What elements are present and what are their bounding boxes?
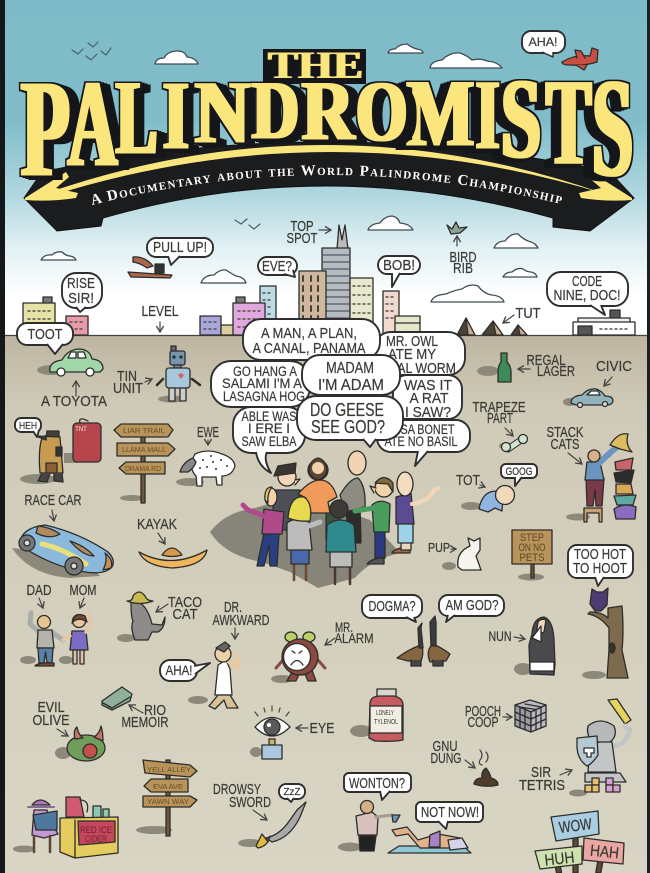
- rio memoir: book: RIO: [144, 703, 166, 719]
- civic: car: [563, 359, 632, 408]
- title word: PALINDROMISTS: A: [68, 55, 117, 192]
- rio memoir: book: [102, 687, 168, 731]
- person: grey sweater bald: [340, 451, 366, 543]
- stack cats: man and cats: [546, 425, 636, 522]
- title word: PALINDROMISTS: T: [546, 54, 591, 190]
- regal lager: bottle: [477, 353, 575, 382]
- sky background: [0, 0, 650, 336]
- race car: RACE CAR: [24, 493, 82, 509]
- bubble: able was i: I ERE I: [248, 421, 290, 436]
- bubble: rise sir: SIR!: [68, 291, 94, 307]
- label: top spot: [286, 219, 331, 247]
- signpost: yell alley, eva ave, yawn way: EVA AVE: [153, 782, 183, 791]
- mr alarm: ALARM: [334, 630, 374, 646]
- bubble: lisa bonet: ATE NO BASIL: [384, 434, 458, 449]
- evil olive: OLIVE: [32, 713, 70, 729]
- wonton: man with bowl: WONTON?: [349, 776, 405, 792]
- regal lager: bottle: REGAL: [526, 353, 566, 369]
- building with code nine bubble: [573, 310, 635, 335]
- too hot to hoot: owl on tree: TO HOOT: [573, 560, 627, 577]
- bubble: AHA plane: AHA!: [528, 35, 558, 49]
- TNT barrel: [64, 419, 101, 463]
- civic: car: CIVIC: [596, 359, 632, 375]
- tin unit: robot: [113, 346, 200, 402]
- crowd of palindromists: [243, 451, 438, 584]
- person: green sweater: [355, 478, 393, 564]
- kayak: KAYAK: [137, 517, 177, 533]
- tot: baby with goog bubble: TOT: [456, 473, 480, 489]
- lonely tylenol bottle: LONELY: [376, 710, 394, 717]
- banner ribbon: [24, 142, 634, 231]
- person: black hat man: [272, 463, 300, 530]
- trapeze part: dumbbell: [472, 400, 528, 452]
- title word: PALINDROMISTS: L: [116, 59, 157, 176]
- picket signs: wow, huh, hah: [535, 811, 624, 873]
- bubble: pull up: [147, 238, 213, 265]
- gnu dung: GNU: [432, 739, 458, 755]
- ewe: sheep: EWE: [197, 425, 219, 441]
- bubble: was it a rat: WAS IT: [404, 377, 452, 394]
- icon and label: bird rib: BIRD: [450, 250, 476, 266]
- label: top spot: TOP: [290, 219, 314, 235]
- eye: [250, 706, 334, 759]
- drowsy sword: ZzZ: [284, 786, 301, 798]
- dogma: geese: [362, 595, 504, 666]
- icon and label: bird rib: RIB: [453, 261, 473, 277]
- label: level: [142, 304, 178, 332]
- too hot to hoot: owl on tree: [568, 545, 633, 679]
- person: purple shirt old woman: [392, 472, 438, 553]
- evil olive: [32, 700, 105, 761]
- dr awkward: AHA!: [166, 663, 192, 678]
- red ice cider stand: RED ICE: [80, 825, 112, 835]
- title word: PALINDROMISTS: S: [592, 51, 633, 206]
- pyramids: Tut: [457, 318, 527, 335]
- bubble: madam: [302, 355, 400, 395]
- pup: dog: PUP: [428, 540, 450, 555]
- nun: [488, 617, 555, 675]
- signpost: liar trail, llama mall, drama road: DRAMA RD: [125, 464, 162, 473]
- bubble: go hang a salami: [211, 361, 310, 407]
- title: [18, 44, 635, 272]
- picket signs: wow, huh, hah: HUH: [544, 850, 575, 870]
- dr awkward: [160, 600, 270, 709]
- dr awkward: DR.: [224, 600, 242, 616]
- taco cat: TACO: [168, 594, 202, 611]
- dad and mom: DAD: [26, 583, 52, 599]
- kayak: [137, 517, 207, 568]
- toyota: car, bubble, label: A TOYOTA: [41, 394, 107, 410]
- TNT barrel: TNT: [75, 427, 87, 433]
- bubble: able was i: SAW ELBA: [242, 434, 296, 449]
- bubble: bob: BOB!: [383, 258, 415, 274]
- step on no pets sign: ON NO: [518, 542, 546, 554]
- tin unit: robot: TIN: [117, 369, 137, 385]
- crowd shadow: [210, 495, 400, 588]
- dad and mom: [20, 583, 96, 666]
- sir tetris: knight: [519, 699, 631, 796]
- icon and label: bird rib: [447, 222, 476, 277]
- bubble: a man a plan: A MAN, A PLAN,: [261, 325, 357, 342]
- title word: PALINDROMISTS: R: [302, 65, 355, 158]
- drowsy sword: SWORD: [229, 794, 271, 811]
- evil olive: EVIL: [38, 700, 64, 716]
- speech bubbles cluster: [211, 319, 470, 473]
- pooch coop: cube: [465, 700, 546, 732]
- title word: PALINDROMISTS: N: [195, 62, 250, 161]
- drowsy sword: DROWSY: [213, 781, 261, 798]
- trapeze part: dumbbell: TRAPEZE: [472, 400, 526, 416]
- tot: baby with goog bubble: [456, 464, 537, 512]
- trapeze part: dumbbell: PART: [487, 411, 513, 427]
- birds: [72, 42, 260, 229]
- too hot to hoot: owl on tree: TOO HOT: [574, 546, 626, 563]
- spy with heh bubble: [15, 418, 63, 484]
- toyota: car, bubble, label: [17, 323, 107, 410]
- mr alarm: [271, 619, 374, 683]
- bubble: code nine doc: CODE: [572, 274, 602, 290]
- step on no pets sign: [512, 530, 552, 580]
- bubble: rise sir: RISE: [67, 276, 95, 292]
- taco cat: [117, 592, 202, 642]
- picket signs: wow, huh, hah: HAH: [589, 843, 620, 862]
- bubble: do geese: [297, 396, 403, 447]
- label: top spot: SPOT: [286, 231, 318, 247]
- bubble: was it a rat: [393, 375, 462, 421]
- title word: PALINDROMISTS: I: [163, 62, 189, 170]
- toyota: car, bubble, label: TOOT: [28, 327, 63, 343]
- tot: baby with goog bubble: GOOG: [506, 466, 532, 478]
- pooch coop: cube: POOCH: [465, 704, 501, 720]
- bubble: code nine doc: NINE, DOC!: [554, 288, 620, 304]
- step on no pets sign: PETS: [520, 552, 544, 564]
- ground: [0, 335, 650, 873]
- bubble: go hang a salami: LASAGNA HOG: [223, 388, 305, 404]
- title word: PALINDROMISTS: S: [501, 55, 541, 182]
- title word: PALINDROMISTS: D: [252, 66, 299, 157]
- bubble: eve: [258, 257, 297, 277]
- lonely tylenol bottle: TYLENOL: [374, 719, 398, 726]
- signpost: liar trail, llama mall, drama road: LIAR TRAIL: [123, 426, 165, 435]
- sir tetris: knight: SIR: [531, 765, 551, 781]
- bubble: eve: EVE?: [262, 259, 292, 275]
- picket signs: wow, huh, hah: WOW: [558, 816, 594, 837]
- bubble: do geese: DO GEESE: [310, 400, 384, 420]
- bubble: pull up: PULL UP!: [153, 240, 207, 256]
- bubble: code nine doc: [547, 272, 628, 315]
- not now: sunbather: [388, 802, 483, 853]
- icon: flying superhero: [128, 257, 172, 278]
- signpost: yell alley, eva ave, yawn way: YAWN WAY: [147, 797, 189, 806]
- gnu dung: [430, 739, 498, 786]
- bubble: go hang a salami: SALAMI I'M A: [222, 375, 303, 391]
- skyline buildings: [23, 225, 420, 335]
- bubble: mr owl: METAL WORM: [372, 361, 456, 377]
- bubble: able was i: [233, 407, 305, 473]
- dogma: geese: DOGMA?: [368, 599, 416, 615]
- spy with heh bubble: HEH: [19, 420, 37, 432]
- signpost: yell alley, eva ave, yawn way: YELL ALLEY: [147, 765, 191, 774]
- signpost: liar trail, llama mall, drama road: LLAMA MALL: [122, 445, 166, 454]
- subtitle: A Documentary about the World Palindrome Championship: [92, 165, 562, 205]
- bubble: able was i: ABLE WAS: [242, 409, 296, 424]
- title word: PALINDROMISTS: M: [407, 61, 474, 167]
- stack cats: man and cats: CATS: [550, 437, 580, 453]
- signpost: liar trail, llama mall, drama road: [114, 424, 175, 503]
- person: yellow hair in grey: [287, 497, 320, 580]
- bubble: mr owl: MR. OWL: [386, 334, 438, 350]
- bubble: madam: I'M ADAM: [318, 377, 384, 394]
- regal lager: bottle: LAGER: [537, 364, 575, 380]
- title word: PALINDROMISTS: [21, 51, 633, 206]
- person: magenta shirt child: [243, 487, 284, 566]
- bubble: rise sir: [62, 273, 102, 312]
- eye: EYE: [310, 720, 334, 737]
- pooch coop: cube: COOP: [468, 715, 498, 731]
- race car: [12, 493, 113, 578]
- step on no pets sign: STEP: [520, 532, 544, 544]
- nun: NUN: [488, 629, 512, 644]
- bubble: bob: [378, 256, 420, 287]
- bubble: go hang a salami: GO HANG A: [233, 363, 298, 379]
- title word: PALINDROMISTS: O: [356, 64, 407, 159]
- signpost: yell alley, eva ave, yawn way: [136, 760, 197, 836]
- stack cats: man and cats: STACK: [546, 425, 584, 441]
- dad and mom: MOM: [70, 583, 96, 599]
- horizon line: [0, 334, 650, 336]
- sir tetris: knight: TETRIS: [519, 778, 565, 794]
- ewe: sheep: [176, 425, 235, 486]
- lonely tylenol bottle: [350, 689, 403, 741]
- red ice cider stand: CIDER: [85, 834, 107, 844]
- bubble: do geese: SEE GOD?: [311, 417, 385, 437]
- dr awkward: AWKWARD: [212, 613, 270, 629]
- drowsy sword: [213, 781, 306, 848]
- bubble: was it a rat: I SAW?: [405, 404, 451, 421]
- bubble: was it a rat: A RAT: [410, 390, 448, 407]
- bubble: a man a plan: [243, 319, 380, 360]
- tin unit: robot: UNIT: [113, 381, 143, 397]
- rio memoir: book: MEMOIR: [122, 715, 168, 731]
- label: tut: TUT: [516, 305, 540, 322]
- label: level: LEVEL: [142, 304, 178, 320]
- title word: THE: THE: [268, 44, 363, 87]
- title word: PALINDROMISTS: I: [476, 59, 499, 170]
- red ice cider stand: [13, 797, 118, 858]
- clouds: [41, 44, 538, 302]
- mr alarm: MR.: [335, 619, 353, 635]
- bubble: a man a plan: A CANAL, PANAMA: [252, 340, 366, 357]
- person: orange shirt beard: [298, 458, 340, 540]
- bubble: lisa bonet: [377, 420, 470, 466]
- bubble: mr owl: [372, 332, 465, 377]
- pup: dog: [428, 538, 481, 570]
- bubble: mr owl: ATE MY: [388, 346, 436, 363]
- dogma: geese: AM GOD?: [446, 598, 498, 614]
- person: teal sweater: [326, 500, 356, 584]
- label: tut: [503, 305, 540, 323]
- taco cat: CAT: [172, 606, 198, 623]
- not now: sunbather: NOT NOW!: [421, 805, 479, 821]
- bubble: AHA plane: [522, 31, 565, 57]
- bubble: lisa bonet: LISA BONET: [392, 422, 454, 437]
- gnu dung: DUNG: [430, 751, 462, 767]
- bubble: madam: MADAM: [326, 360, 374, 377]
- title word: PALINDROMISTS: P: [21, 51, 70, 206]
- icon: red plane: [562, 48, 598, 70]
- wonton: man with bowl: [338, 773, 411, 852]
